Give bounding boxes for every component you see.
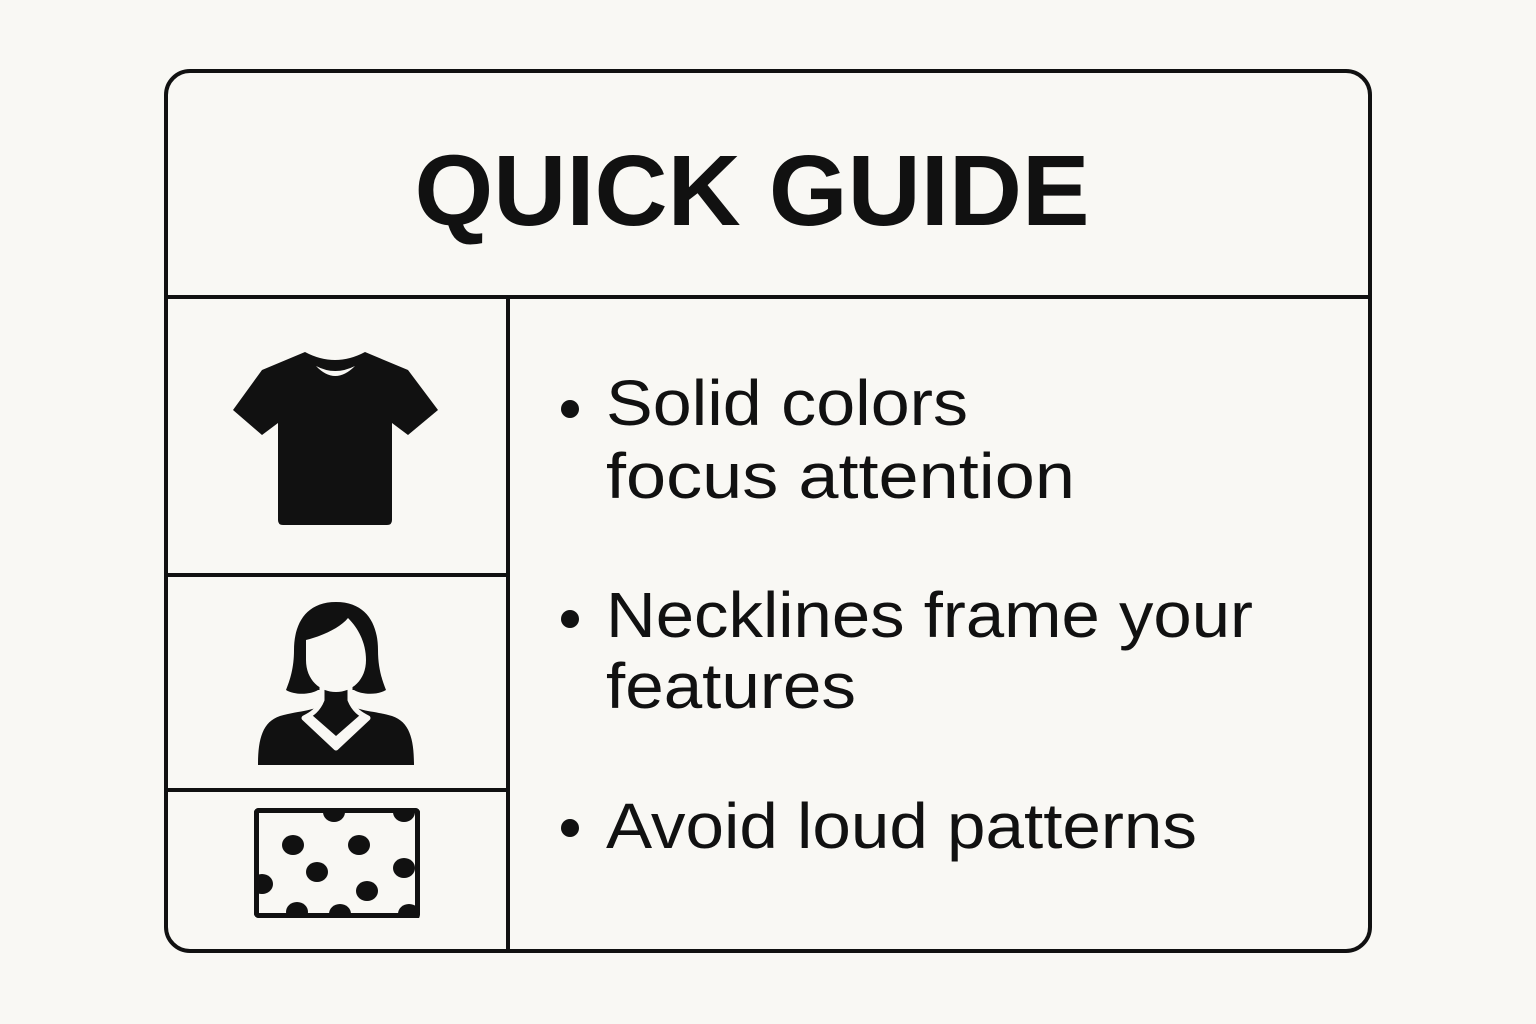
icon: woman bust [258, 602, 414, 765]
icon: polka dot pattern [251, 802, 420, 924]
text block: bullet 2: features [606, 650, 856, 722]
icon: t-shirt [233, 352, 438, 525]
text block: bullet 1: focus attention [606, 440, 1075, 512]
panel: quick guide card [166, 71, 1370, 951]
face [306, 618, 366, 692]
text block: bullet 2: Necklines frame your [606, 579, 1253, 651]
text block: bullet 3: Avoid loud patterns [606, 790, 1197, 862]
v collar [304, 715, 368, 746]
neck with white outline [304, 682, 368, 748]
text block: bullet 1 [561, 367, 1075, 512]
body [258, 700, 414, 765]
hair [286, 602, 386, 694]
text block: bullet 2 [561, 579, 1253, 722]
title: QUICK GUIDE [414, 135, 1090, 247]
text block: bullet 1: Solid colors [606, 367, 968, 439]
